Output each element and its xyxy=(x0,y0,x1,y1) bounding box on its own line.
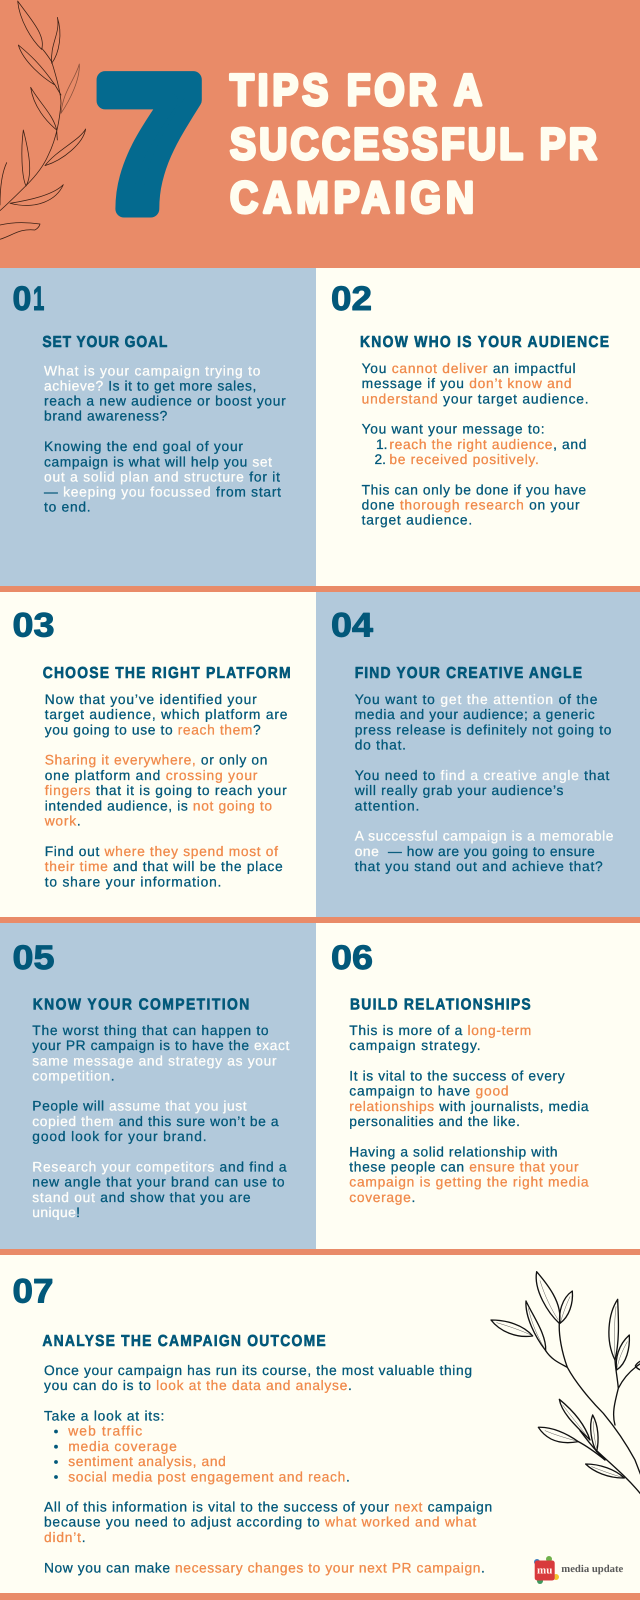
body text: you going to use to reach them? xyxy=(45,722,261,737)
body text: competition. xyxy=(32,1068,115,1083)
body text: personalities and the like. xyxy=(349,1114,520,1129)
header banner xyxy=(0,0,640,268)
number 01 xyxy=(12,280,44,318)
body text: work. xyxy=(44,813,81,828)
body text: social media post engagement and reach. xyxy=(68,1469,350,1484)
body text: unique! xyxy=(32,1205,80,1220)
body text: didn’t. xyxy=(44,1530,86,1545)
body text: 1. xyxy=(376,437,388,452)
body text: You need to find a creative angle that xyxy=(355,768,610,783)
body text xyxy=(44,1363,492,1575)
heading: SET YOUR GOAL xyxy=(42,334,168,351)
body text: reach the right audience, and xyxy=(389,437,586,452)
logo: media update: mu xyxy=(537,1564,552,1576)
body text: achieve? Is it to get more sales, xyxy=(44,378,256,393)
body text: You want your message to: xyxy=(362,422,545,437)
body text: same message and strategy as your xyxy=(32,1053,277,1068)
panel: tip 06 build relationships xyxy=(316,923,640,1249)
body text: What is your campaign trying to xyxy=(44,363,261,378)
body text: campaign is what will help you set xyxy=(44,454,272,469)
number 01: 1 xyxy=(33,280,44,318)
body text: media coverage xyxy=(68,1439,177,1454)
panel: tip 02 know your audience xyxy=(316,268,640,586)
body text: coverage. xyxy=(349,1190,415,1205)
body text: your PR campaign is to have the exact xyxy=(32,1038,289,1053)
body text xyxy=(362,361,589,528)
body text: You want to get the attention of the xyxy=(355,692,598,707)
number 04: 04 xyxy=(331,606,373,644)
body text: one — how are you going to ensure xyxy=(355,844,595,859)
number 02: 02 xyxy=(331,280,372,318)
body text: copied them and this sure won’t be a xyxy=(32,1114,279,1129)
body text: campaign strategy. xyxy=(349,1038,481,1053)
body text: This can only be done if you have xyxy=(362,482,586,497)
body text: Knowing the end goal of your xyxy=(44,439,243,454)
number 07: 07 xyxy=(12,1272,54,1310)
body text: done thorough research on your xyxy=(362,498,580,513)
body text xyxy=(32,1023,289,1220)
logo: media update xyxy=(534,1556,624,1584)
body text: stand out and show that you are xyxy=(32,1190,251,1205)
body text: target audience, which platform are xyxy=(45,707,288,722)
logo: media update: media update xyxy=(561,1564,624,1575)
title: CAMPAIGN xyxy=(230,173,474,222)
body text: understand your target audience. xyxy=(362,391,589,406)
body text xyxy=(354,692,614,874)
number 01: 0 xyxy=(12,280,31,318)
body text: target audience. xyxy=(362,513,472,528)
body text: Sharing it everywhere, or only on xyxy=(45,753,267,768)
body text: intended audience, is not going to xyxy=(45,798,272,813)
number 05: 05 xyxy=(12,939,54,977)
heading: ANALYSE THE CAMPAIGN OUTCOME xyxy=(42,1333,326,1350)
body text: web traffic xyxy=(67,1424,142,1439)
heading: KNOW YOUR COMPETITION xyxy=(33,996,249,1013)
body text: Now you can make necessary changes to your next PR campaign. xyxy=(44,1560,485,1575)
body text: message if you don’t know and xyxy=(362,376,572,391)
body text: — keeping you focussed from start xyxy=(44,485,281,500)
body text: these people can ensure that your xyxy=(349,1160,579,1175)
body text: will really grab your audience’s xyxy=(354,783,563,798)
big number 7: 7 xyxy=(97,39,202,249)
body text: Having a solid relationship with xyxy=(349,1144,558,1159)
body text: 2. xyxy=(374,452,386,467)
body text: Take a look at its: xyxy=(44,1409,164,1424)
heading: BUILD RELATIONSHIPS xyxy=(350,996,531,1013)
body text: The worst thing that can happen to xyxy=(32,1023,269,1038)
number 03: 03 xyxy=(12,606,54,644)
body text: press release is definitely not going to xyxy=(355,722,612,737)
body text: brand awareness? xyxy=(44,409,168,424)
body text: sentiment analysis, and xyxy=(68,1454,226,1469)
body text: reach a new audience or boost your xyxy=(44,394,286,409)
body text: campaign is getting the right media xyxy=(349,1175,589,1190)
body text: This is more of a long-term xyxy=(349,1023,531,1038)
body text: A successful campaign is a memorable xyxy=(355,829,614,844)
body text xyxy=(44,363,286,515)
panel: tip 05 know your competition xyxy=(0,923,316,1249)
body text: All of this information is vital to the success of your next campaign xyxy=(44,1500,492,1515)
body text: People will assume that you just xyxy=(32,1099,247,1114)
body text xyxy=(349,1023,589,1205)
body text: campaign to have good xyxy=(349,1084,509,1099)
heading: FIND YOUR CREATIVE ANGLE xyxy=(355,665,582,682)
body text: You cannot deliver an impactful xyxy=(362,361,576,376)
body text: to share your information. xyxy=(45,874,221,889)
body text: relationships with journalists, media xyxy=(349,1099,589,1114)
title xyxy=(230,66,597,222)
body text: that you stand out and achieve that? xyxy=(355,859,603,874)
panel: tip 07 analyse the campaign outcome xyxy=(0,1255,640,1593)
icon: black leaf branch xyxy=(491,1272,640,1494)
heading: CHOOSE THE RIGHT PLATFORM xyxy=(43,665,291,682)
body text: one platform and crossing your xyxy=(45,768,258,783)
icon: leaf branch xyxy=(0,1,86,239)
number 06: 06 xyxy=(331,939,373,977)
body text: out a solid plan and structure for it xyxy=(44,469,280,484)
body text: you can do is to look at the data and analyse. xyxy=(44,1378,352,1393)
body text xyxy=(44,692,288,889)
body text: because you need to adjust according to what worked and what xyxy=(44,1515,476,1530)
body text: do that. xyxy=(355,737,406,752)
body text: media and your audience; a generic xyxy=(355,707,595,722)
body text: be received positively. xyxy=(389,452,539,467)
body text: Research your competitors and find a xyxy=(32,1160,287,1175)
heading: KNOW WHO IS YOUR AUDIENCE xyxy=(360,334,609,351)
body text: Now that you’ve identified your xyxy=(45,692,257,707)
title: SUCCESSFUL PR xyxy=(230,120,597,169)
body text: attention. xyxy=(355,798,419,813)
body text: Find out where they spend most of xyxy=(45,844,278,859)
body text: fingers that it is going to reach your xyxy=(45,783,287,798)
body text: to end. xyxy=(44,500,91,515)
body text: Once your campaign has run its course, the most valuable thing xyxy=(44,1363,472,1378)
panel: tip 04 find your creative angle xyxy=(316,592,640,917)
body text: good look for your brand. xyxy=(32,1129,207,1144)
panel: tip 01 set your goal xyxy=(0,268,316,586)
title: TIPS FOR A xyxy=(230,66,482,115)
body text: new angle that your brand can use to xyxy=(32,1175,285,1190)
panel: tip 03 choose the right platform xyxy=(0,592,316,917)
body text: their time and that will be the place xyxy=(45,859,283,874)
body text: It is vital to the success of every xyxy=(349,1069,565,1084)
